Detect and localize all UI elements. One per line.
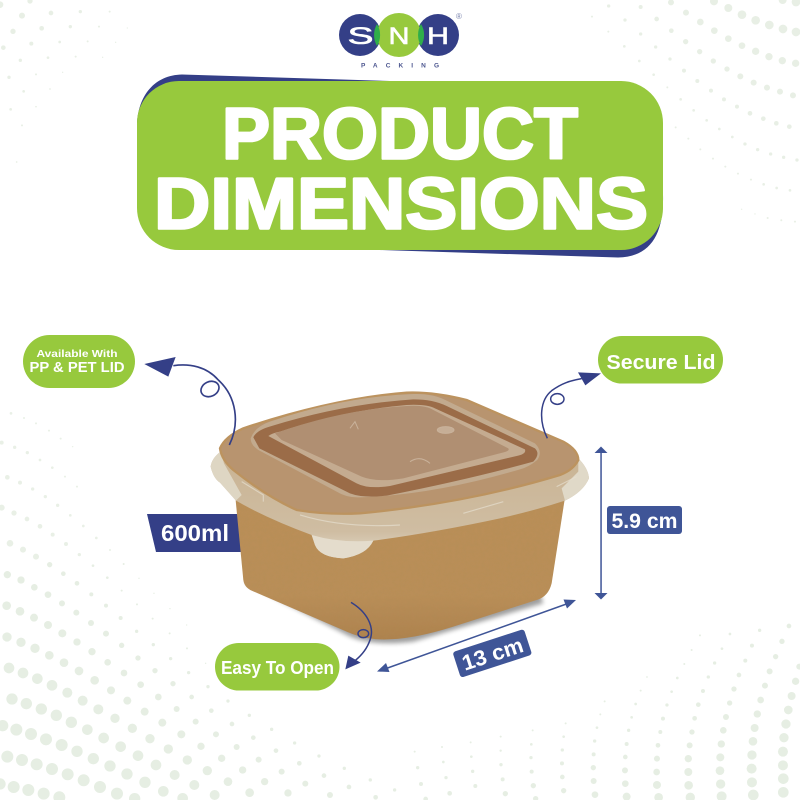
logo: SNH Packing: ® <box>456 12 462 21</box>
arrow: width dimension <box>377 600 576 672</box>
pill: easy to open: Easy To Open <box>221 658 334 678</box>
tub shadow <box>247 577 543 643</box>
lid recess center <box>275 406 509 480</box>
pill: available with PP and PET lid: PP & PET LID <box>30 359 125 376</box>
product: kraft paper tub with clear lid <box>211 393 589 643</box>
lid recess ridge <box>251 394 540 497</box>
curly arrow to PP and PET lid pill <box>144 357 235 445</box>
logo: SNH Packing: PACKING <box>361 62 439 70</box>
logo: SNH Packing: H <box>427 23 449 50</box>
logo: SNH Packing: N <box>388 23 410 50</box>
lid clear flange left <box>211 452 242 501</box>
lid clear rim <box>211 452 589 558</box>
lid kraft top <box>220 393 578 514</box>
title banner <box>137 74 663 258</box>
lid snap tab <box>312 535 373 558</box>
halftone dot background: top right <box>591 0 800 223</box>
lid snap details <box>242 477 577 526</box>
halftone dot background: bottom left <box>0 562 396 800</box>
pill: secure lid <box>598 336 723 384</box>
halftone dot background: left side <box>0 412 111 560</box>
label: 5.9 cm height: 5.9 cm <box>612 510 678 533</box>
banner green panel <box>137 81 663 250</box>
tub body <box>235 493 566 639</box>
title text: PRODUCT <box>222 94 578 174</box>
pill: available with PP and PET lid <box>23 335 135 388</box>
lid recess light inner ridge <box>268 405 525 487</box>
banner navy shadow <box>137 74 663 258</box>
tag: 600ml capacity: 600ml <box>161 520 229 546</box>
logo: SNH Packing: S <box>348 23 374 50</box>
title text <box>154 94 648 244</box>
pill: available with PP and PET lid: Available With <box>36 348 118 360</box>
label: 13 cm width: 13 cm <box>459 633 526 675</box>
halftone dot background: top left <box>0 0 128 163</box>
pill: easy to open <box>215 643 340 690</box>
title text: DIMENSIONS <box>154 164 648 244</box>
curly arrow to easy to open pill <box>345 602 371 669</box>
arrow: height dimension <box>594 446 608 600</box>
halftone dot background: bottom right <box>414 624 800 800</box>
pill: secure lid: Secure Lid <box>606 351 716 374</box>
lid clear flange right <box>562 458 589 501</box>
curly arrow to secure lid pill <box>542 372 601 438</box>
tag: 600ml capacity <box>147 514 243 552</box>
lid embossed marks <box>350 422 454 463</box>
lid recess moat <box>253 399 537 497</box>
logo: SNH Packing <box>339 12 462 70</box>
